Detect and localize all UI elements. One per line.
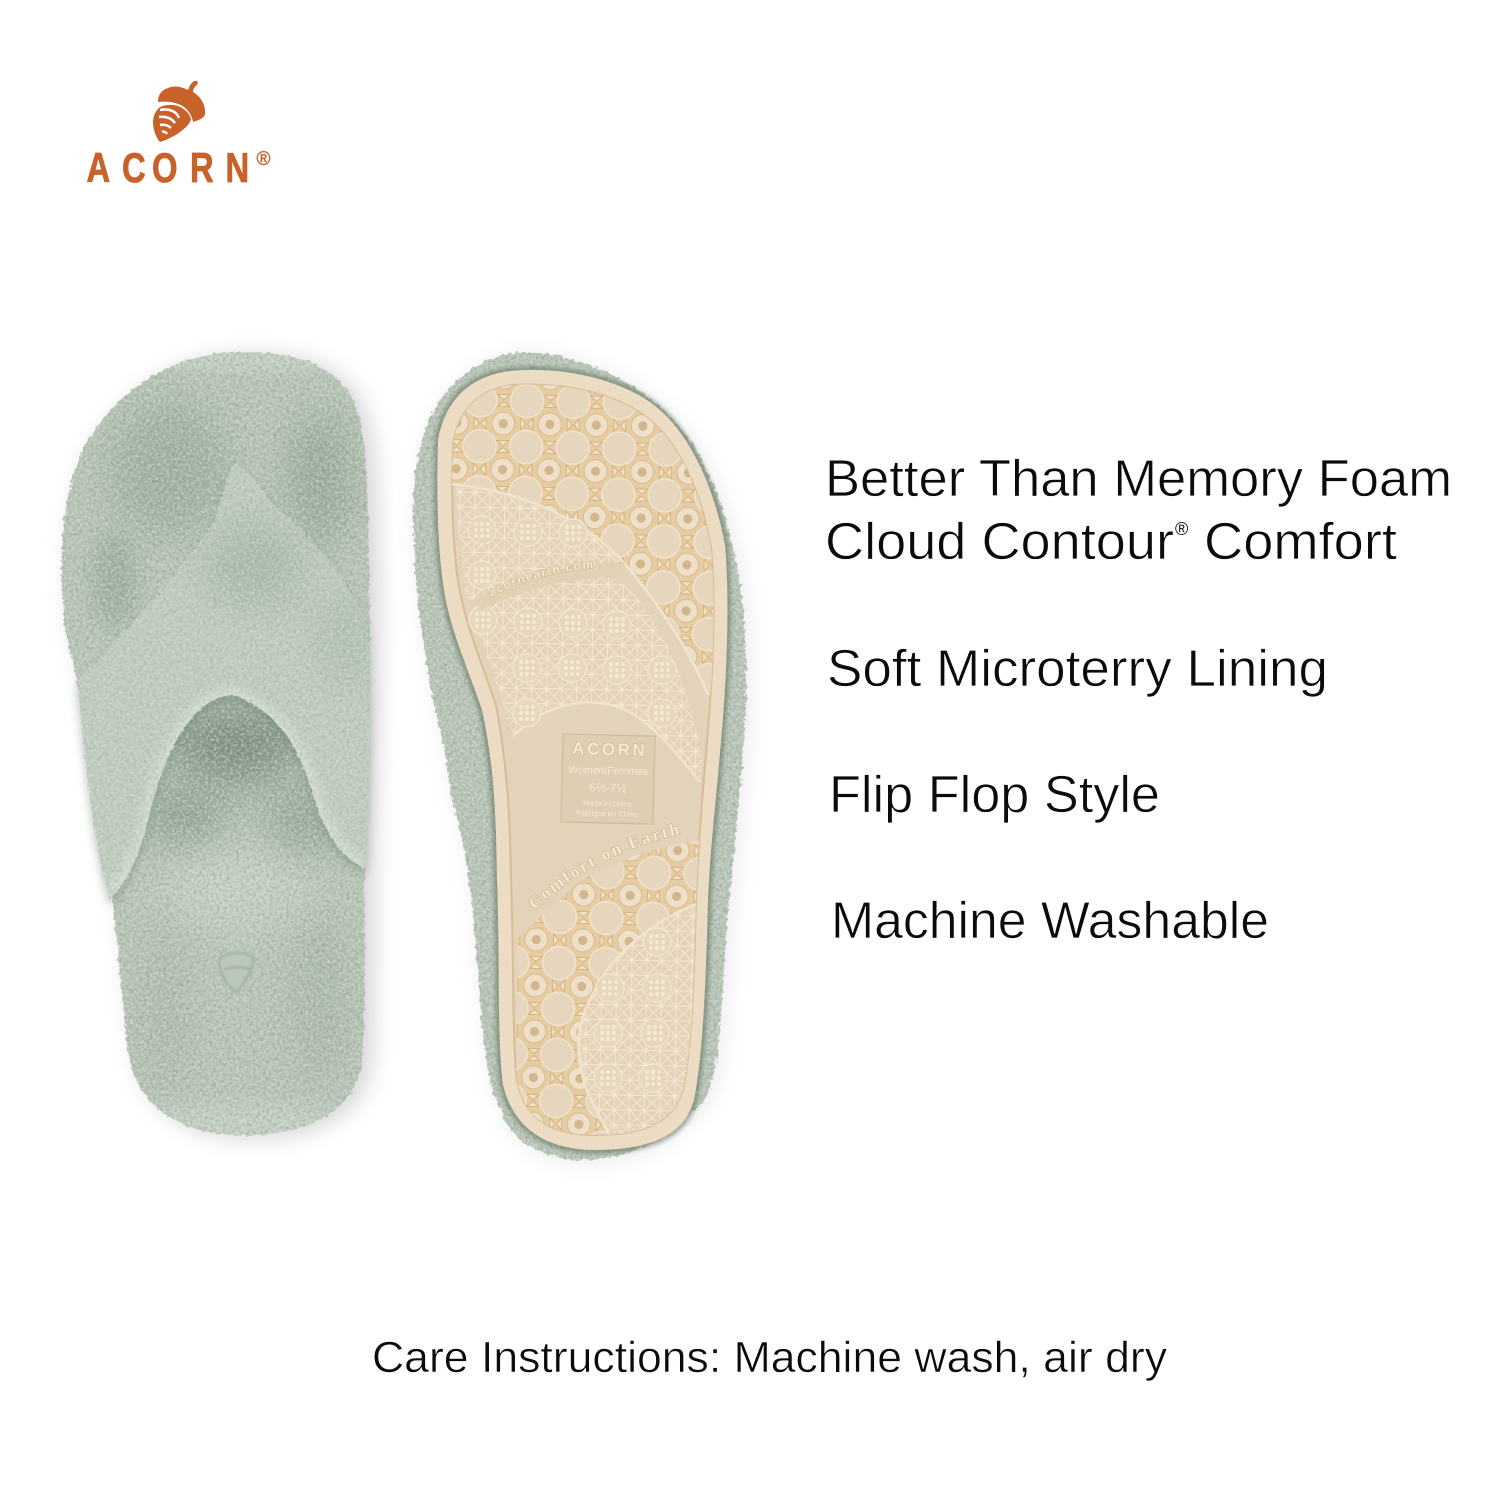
slipper strap (78, 464, 371, 905)
feature: cloud contour comfort line: Comfort (1204, 513, 1398, 571)
slipper acorn emboss (219, 953, 254, 992)
feature: cloud contour comfort line (825, 513, 1398, 571)
sole website text: acornearth.com (488, 561, 594, 597)
forefoot circle tread (452, 384, 714, 695)
slipper shadow (70, 355, 379, 1138)
sole size label: 6½-7½ (589, 781, 627, 795)
website text band (478, 569, 625, 604)
feature list (825, 450, 1452, 950)
sole size label: ACORN (572, 739, 648, 760)
sole size label (561, 734, 655, 824)
feature: style: Flip Flop Style (829, 766, 1160, 824)
midfoot lattice tread (470, 574, 702, 782)
sole slogan text: Comfort on Earth (529, 823, 680, 908)
dotted tread pads (468, 516, 676, 1092)
heel circle tread (515, 840, 700, 1140)
fur shade next to sole (437, 370, 727, 1150)
tread patterns (452, 384, 714, 1135)
slipper footbed (62, 352, 370, 1136)
feature: cloud contour comfort line: Cloud Contour (825, 513, 1174, 571)
feature: lining: Soft Microterry Lining (827, 640, 1328, 698)
rubber outsole (437, 370, 727, 1150)
terry fur edge (413, 352, 746, 1160)
forefoot lattice tread (455, 487, 627, 602)
product: slipper top view (62, 352, 379, 1138)
feature: washable: Machine Washable (831, 892, 1269, 950)
care instructions: Care Instructions: Machine wash, air dry (372, 1333, 1167, 1382)
registered mark: ® (256, 149, 270, 170)
logo wordmark: ACORN (86, 144, 249, 191)
product: slipper sole view (411, 351, 752, 1164)
sole size label: Fabriqué en Chine (576, 808, 638, 819)
sole shadow (417, 355, 750, 1163)
inner sole panel (452, 384, 713, 1135)
sole size label: Made In China (583, 798, 633, 809)
icon: acorn (153, 81, 205, 142)
feature: memory foam line: Better Than Memory Foam (825, 450, 1452, 508)
feature: cloud contour comfort line: ® (1175, 519, 1188, 539)
brand logo: Acorn (86, 81, 270, 191)
tread boundary lines (450, 484, 708, 1140)
heel lattice tread (579, 903, 700, 1140)
sole size label: Women/Femmes (568, 764, 648, 778)
